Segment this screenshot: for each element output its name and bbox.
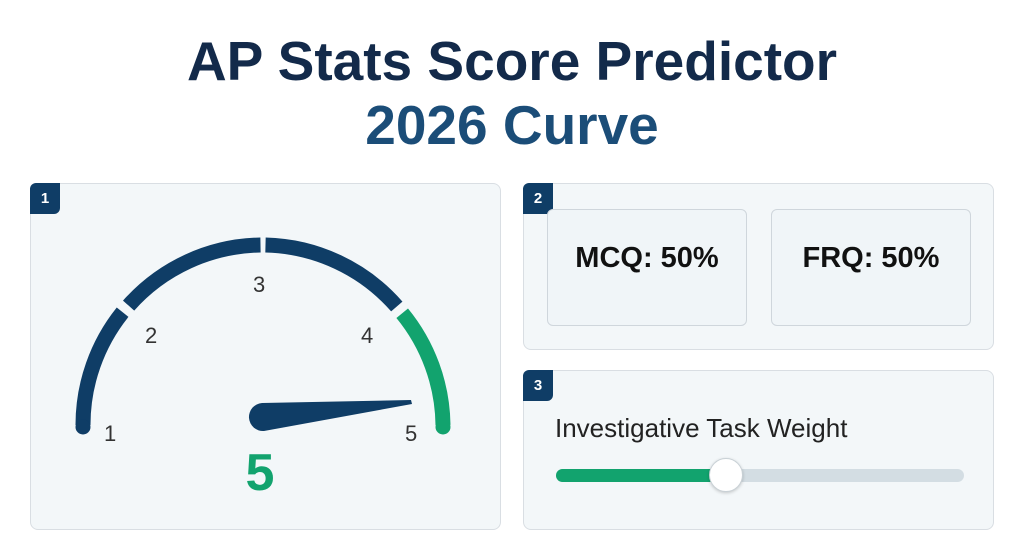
- panel: weighting: [523, 183, 994, 350]
- gauge chart: 3: [253, 272, 265, 297]
- gauge chart: 4: [361, 323, 373, 348]
- badge 1: [30, 183, 60, 214]
- MCQ box: MCQ: 50%: [575, 242, 719, 274]
- panel: gauge: [30, 183, 501, 530]
- gauge chart: 2: [145, 323, 157, 348]
- title: AP Stats Score Predictor: [187, 30, 837, 92]
- badge 1: 1: [41, 190, 49, 207]
- gauge chart: 1: [104, 421, 116, 446]
- badge 3: [523, 370, 553, 401]
- FRQ box: [771, 209, 971, 326]
- title: [187, 30, 837, 156]
- MCQ box: [547, 209, 747, 326]
- badge 2: 2: [534, 190, 542, 207]
- panel: slider: [523, 370, 994, 530]
- gauge chart: 5: [246, 444, 274, 502]
- slider label: Investigative Task Weight: [555, 413, 847, 443]
- badge 3: 3: [534, 377, 542, 394]
- title: 2026 Curve: [365, 94, 659, 156]
- gauge chart: 5: [405, 421, 417, 446]
- slider: [556, 469, 964, 482]
- badge 2: [523, 183, 553, 214]
- FRQ box: FRQ: 50%: [802, 242, 939, 274]
